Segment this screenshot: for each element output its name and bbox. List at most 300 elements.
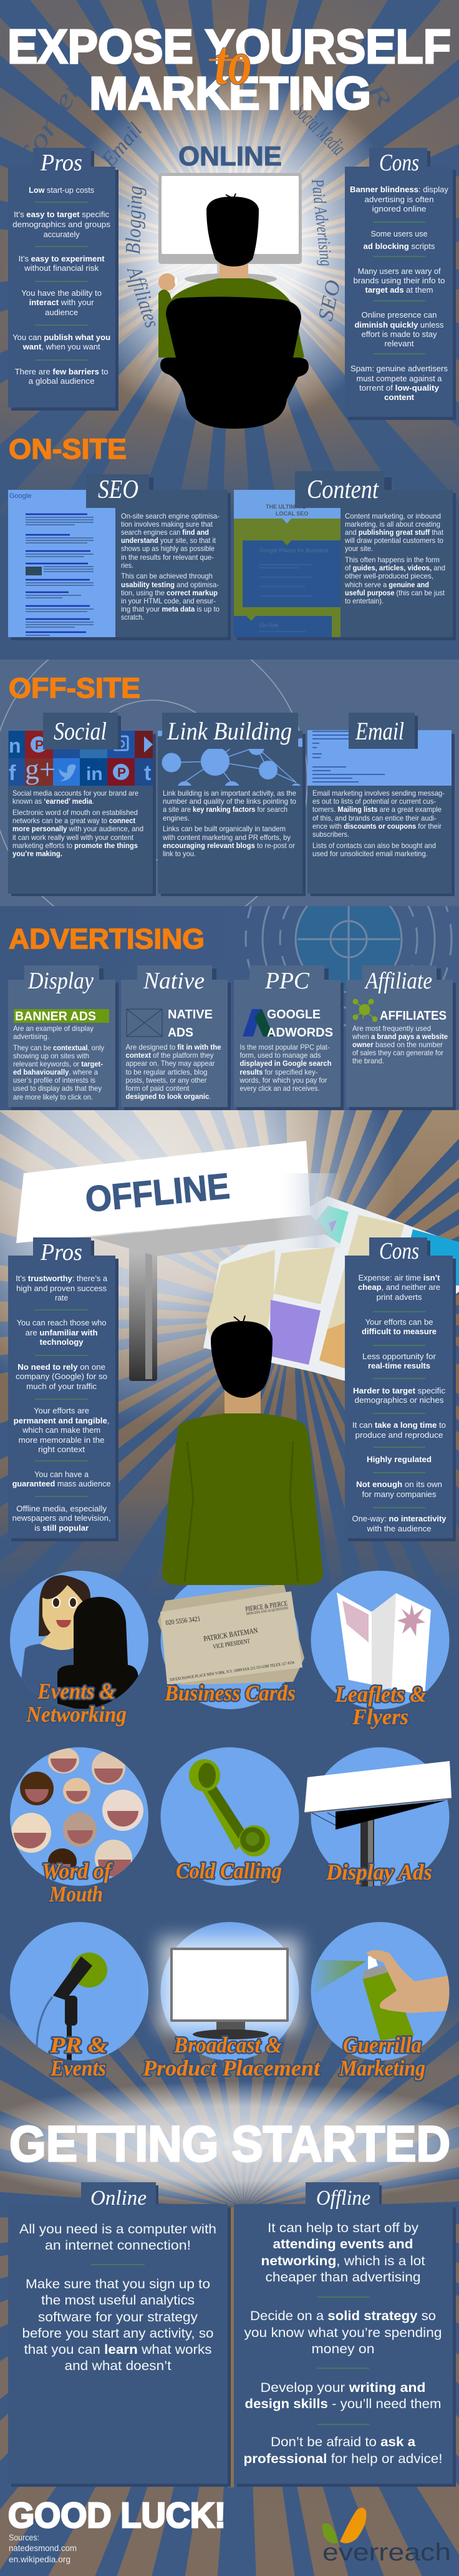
offline tips — [243, 2221, 443, 2466]
offline tips: It can help to start off by — [268, 2221, 419, 2235]
sign text: offline: OFFLINE — [84, 1166, 231, 1220]
cons list: Expense: air time isn’t — [358, 1273, 440, 1282]
background: off-site section — [0, 660, 459, 906]
pros list: demographics and groups — [12, 220, 111, 229]
display text: Are an example of display — [13, 1024, 94, 1033]
illustration: person at computer — [158, 193, 309, 429]
background script words: Blogging — [122, 185, 147, 255]
heading: online: Online — [90, 2187, 147, 2210]
pros list: is still popular — [34, 1523, 89, 1533]
heading: affiliate: Affiliate — [364, 968, 432, 994]
heading: good luck: GOOD LUCK! — [8, 2496, 226, 2535]
pros list — [12, 185, 111, 386]
content text: of guides, articles, videos, and — [345, 564, 445, 572]
image: social icons mosaic: P — [35, 738, 44, 753]
cons list: Highly regulated — [367, 1455, 432, 1464]
circle: broadcast and product placement — [142, 1922, 321, 2081]
email text: used for unsolicited email marketing. — [312, 849, 428, 858]
label: broadcast and product placement: Broadcast & — [173, 2032, 282, 2057]
illustration: telephone handset — [189, 1759, 270, 1856]
illustration: two people talking — [21, 1575, 138, 1710]
display text — [13, 1024, 104, 1101]
image: link network — [158, 731, 302, 786]
title: MARKETING — [89, 67, 371, 119]
label: cold calling: Cold Calling — [176, 1858, 282, 1883]
cons list: Harder to target specific — [353, 1386, 446, 1395]
background script words: Content — [7, 60, 97, 178]
logo: everreach — [322, 2507, 451, 2566]
cons list: torrent of low-quality — [359, 383, 440, 393]
pros list: permanent and tangible , — [14, 1416, 110, 1425]
heading: seo: SEO — [98, 476, 138, 504]
pros list: newspapers and television, — [12, 1513, 111, 1523]
social text: Social media accounts for your brand are — [12, 789, 138, 798]
cons list: content — [384, 393, 415, 402]
sources: en.wikipedia.org — [9, 2554, 70, 2564]
heading: ppc: PPC — [264, 968, 310, 994]
google adwords label — [267, 1008, 333, 1040]
google adwords label: ADWORDS — [267, 1026, 333, 1040]
social text: networks can be a great way to connect — [12, 816, 135, 825]
cons list: Online presence can — [362, 310, 437, 320]
panel: native — [121, 965, 231, 1110]
pros list: guaranteed mass audience — [12, 1479, 111, 1488]
panel: seo — [8, 474, 231, 640]
heading: content: Content — [307, 476, 379, 504]
panel: display — [8, 965, 118, 1110]
offline tips: Don’t be afraid to ask a — [271, 2435, 415, 2449]
icon: affiliate network — [353, 998, 378, 1022]
cons list: demographics or niches — [354, 1395, 444, 1405]
heading: advertising: ADVERTISING — [9, 923, 205, 955]
panel: online cons — [345, 148, 456, 420]
cons list: Some users use — [370, 229, 428, 238]
sources: Sources: — [9, 2532, 39, 2542]
email text: Email marketing involves sending messag- — [312, 789, 445, 798]
display text: are more likely to click on. — [13, 1093, 93, 1101]
label: guerrilla marketing: Marketing — [339, 2056, 425, 2081]
seo text: usability testing and optimisa- — [121, 580, 219, 589]
affiliate text: of sales they can generate for — [352, 1048, 443, 1057]
pros list: much of your traffic — [26, 1382, 97, 1391]
cons list: print adverts — [377, 1292, 422, 1302]
image: social icons mosaic: in — [86, 764, 103, 784]
link building text: a site are key ranking factors for search — [163, 805, 287, 814]
pros list: interact with your — [29, 298, 94, 307]
background: getting started glow and fade — [0, 1972, 459, 2576]
email text: tomers. Mailing lists are a great example — [312, 805, 442, 814]
label: events and networking: Networking — [26, 1702, 127, 1727]
affiliate text — [352, 1024, 448, 1065]
pros list: You have the ability to — [21, 288, 102, 298]
image: guide thumbnail: LOCAL SEO — [276, 510, 308, 517]
circle: word of mouth — [10, 1747, 148, 1906]
content text: other well-produced pieces, — [345, 572, 433, 580]
label: guerrilla marketing — [339, 2032, 425, 2081]
seo text — [121, 512, 220, 622]
cons list — [352, 1273, 447, 1533]
background script words: Affiliates — [122, 263, 163, 331]
online tips: Make sure that you sign up to — [26, 2277, 210, 2291]
content text: Content marketing, or inbound — [345, 512, 441, 520]
seo text: understand your site, so that it — [121, 536, 216, 545]
background script words: PR — [347, 58, 396, 112]
display text: showing up on sites with — [13, 1051, 89, 1060]
background: offline glow and fade — [0, 1110, 459, 1603]
banner ads label: BANNER ADS — [15, 1010, 96, 1023]
background: getting started rays — [0, 1972, 459, 2576]
heading: offline: Offline — [316, 2187, 370, 2210]
seo text: shows up as highly as possible — [121, 544, 215, 553]
email text: subscribers. — [312, 830, 349, 839]
pros list: Your efforts are — [34, 1406, 89, 1415]
display text: ed bahaviourally, where a — [13, 1068, 98, 1076]
pros list: There are few barriers to — [15, 367, 109, 376]
seo text: scratch. — [121, 613, 144, 622]
google adwords label: GOOGLE — [267, 1008, 321, 1022]
label: leaflets and flyers — [334, 1682, 427, 1729]
ppc text: every click an ad receives. — [239, 1084, 319, 1093]
native text: to be regular articles, blog — [126, 1068, 207, 1076]
content text: useful purpose (this can be just — [345, 588, 445, 597]
seo text: in the results for relevant que- — [121, 553, 214, 562]
cons list: One-way: no interactivity — [352, 1514, 447, 1523]
image: social icons mosaic — [9, 731, 153, 786]
cons list — [350, 185, 448, 402]
offline tips: attending events and — [273, 2237, 413, 2252]
social text: Electronic word of mouth on established — [12, 808, 138, 817]
illustration: blank billboard sign — [16, 1141, 343, 1381]
cons list: effort is made to stay — [362, 329, 437, 339]
illustration: glowing television — [159, 1938, 300, 2039]
link building text: Links can be built organically in tandem — [163, 824, 286, 833]
cons list: ad blocking scripts — [363, 242, 435, 251]
email text: ence with discounts or coupons for their — [312, 822, 442, 831]
image: guide thumbnail: THE ULTIMATE — [266, 504, 306, 510]
illustration: stack of business cards: PATRICK BATEMAN — [203, 1626, 259, 1643]
label: guerrilla marketing: Guerrilla — [343, 2032, 422, 2057]
heading: online: ONLINE — [178, 141, 282, 172]
native text: context of the platform they — [126, 1051, 213, 1060]
pros list: which can make them — [22, 1425, 100, 1435]
ppc text: results for specified key- — [239, 1068, 318, 1076]
seo text: tion, using the correct markup — [121, 588, 218, 597]
panel: offline cons — [345, 1237, 456, 1541]
offline tips: professional for help or advice! — [243, 2452, 443, 2466]
affiliate text: the brand. — [352, 1056, 384, 1065]
illustration: stack of business cards: 358 EXCHANGE PLACE NEW YORK, N.Y. 10099 FAX 212 555 6390 TELEX 127 4534 — [169, 1661, 295, 1682]
image: search results: Google — [9, 492, 31, 500]
seo text: tion involves making sure that — [121, 520, 213, 529]
pros list — [12, 1274, 111, 1533]
affiliate text: Are most frequently used — [352, 1024, 431, 1033]
seo text: This can be achieved through — [121, 572, 213, 580]
pros list: audience — [45, 308, 78, 317]
panel: getting started online — [8, 2182, 234, 2487]
ppc text: Is the most popular PPC plat- — [239, 1043, 329, 1051]
panel: content — [234, 471, 456, 640]
illustration: microphone — [37, 1953, 107, 2061]
panel: online pros — [8, 148, 118, 411]
circle: business cards — [158, 1571, 304, 1709]
label: leaflets and flyers: Leaflets & — [334, 1682, 427, 1707]
background script words: Paid Advertising — [307, 178, 336, 267]
label: word of mouth — [42, 1858, 113, 1906]
cons list: It can take a long time to — [352, 1420, 446, 1430]
content text: your site. — [345, 544, 373, 553]
display text: user’s profile of interests is — [13, 1076, 95, 1085]
seo text: in your HTML code, and ensur- — [121, 597, 216, 605]
illustration: talking mouths — [11, 1747, 143, 1877]
heading: link building: Link Building — [167, 717, 292, 745]
pros list: It’s easy to target specific — [14, 210, 110, 219]
panel: offline pros — [8, 1237, 118, 1541]
email text — [312, 789, 445, 858]
label: events and networking — [26, 1679, 127, 1727]
label: broadcast and product placement: Product Placement — [142, 2056, 321, 2081]
social text: marketing efforts to promote the things — [12, 841, 138, 850]
native text: posts, tweets, or any other — [126, 1076, 207, 1085]
offline tips: you know what you’re spending — [244, 2326, 442, 2340]
illustration: spray can in hand — [311, 1950, 452, 2041]
link building text: link to you. — [163, 849, 196, 858]
sources: natedesmond.com — [9, 2543, 77, 2553]
background: online rays — [0, 0, 459, 660]
online tips: All you need is a computer with — [19, 2222, 216, 2237]
icon: target crosshair — [244, 906, 453, 1026]
cons list: diminish quickly unless — [354, 320, 444, 329]
off-site target arcs — [0, 660, 307, 906]
label: business cards: Business Cards — [164, 1681, 296, 1705]
ppc text: form, used to manage ads — [239, 1051, 321, 1060]
background: offline rays — [0, 1110, 459, 1603]
title — [7, 20, 451, 119]
display text: They can be contextual, only — [13, 1043, 104, 1052]
pros list: accurately — [44, 230, 80, 239]
seo text: ing that your meta data is up to — [121, 605, 220, 613]
cons list: brands using their info to — [353, 276, 445, 285]
heading: cons: Cons — [379, 150, 419, 176]
cons list: must compete against a — [357, 374, 442, 383]
social text: it can work really well with your content — [12, 833, 134, 842]
online tips: that you can learn what works — [24, 2343, 212, 2357]
illustration: offline person from behind — [162, 1315, 323, 1585]
image: social icons mosaic: f — [9, 761, 16, 785]
pros list: a global audience — [29, 376, 95, 386]
panel: affiliate — [346, 965, 456, 1110]
image: guide thumbnail: Google Places for Business — [259, 547, 329, 554]
display text: used to display ads that they — [13, 1084, 102, 1093]
online tips: and what doesn’t — [65, 2359, 172, 2373]
billboard pole — [129, 1239, 157, 1381]
social text: more personally with your audience, and — [12, 824, 143, 833]
label: pr and events: PR & — [49, 2032, 107, 2057]
pros list: technology — [40, 1337, 84, 1347]
cons list: Spam: genuine advertisers — [350, 364, 448, 373]
heading: on-site: ON-SITE — [9, 433, 127, 465]
link building text: number and quality of the links pointing to — [163, 797, 296, 806]
online tips — [19, 2222, 216, 2373]
pros list: Low start-up costs — [29, 185, 95, 195]
content text: will draw potential customers to — [344, 536, 443, 545]
cons list: produce and reproduce — [355, 1430, 443, 1440]
label: word of mouth: Mouth — [49, 1881, 103, 1906]
online tips: before you start any activity, so — [22, 2326, 213, 2341]
illustration: stack of business cards: VICE PRESIDENT — [213, 1638, 251, 1651]
cons list: ignored online — [372, 204, 427, 213]
pros list: It’s trustworthy: there’s a — [16, 1274, 108, 1283]
offline tips: cheaper than advertising — [266, 2270, 420, 2285]
pros list: without financial risk — [24, 263, 99, 273]
image: guide thumbnail — [234, 490, 341, 637]
native ads label: ADS — [168, 1026, 193, 1040]
circle: guerrilla marketing — [311, 1922, 452, 2081]
pros list: are unfamiliar with — [26, 1328, 98, 1337]
content text — [344, 512, 445, 605]
label: word of mouth: Word of — [42, 1858, 113, 1883]
illustration: stack of business cards: 020 5556 3421 — [165, 1615, 201, 1627]
display text: advertising. — [13, 1032, 49, 1041]
background: fine rays near monitor — [118, 102, 345, 386]
heading: pros: Pros — [40, 150, 82, 176]
icon: adwords logo — [243, 1009, 274, 1037]
native text: Are designed to fit in with the — [126, 1043, 221, 1051]
image: search results — [8, 490, 115, 637]
cons list: real-time results — [368, 1361, 430, 1370]
background script words: Email — [97, 119, 147, 172]
image: social icons mosaic: P — [117, 766, 126, 780]
native text — [126, 1043, 221, 1101]
native text: form of paid content — [126, 1084, 190, 1093]
heading: email: Email — [355, 717, 404, 745]
content text: to entertain). — [345, 597, 384, 605]
content text: marketing, is all about creating — [345, 520, 440, 529]
image: social icons mosaic: t — [144, 761, 151, 785]
background: online glow and fade — [0, 0, 459, 660]
label: pr and events: Events — [50, 2056, 106, 2081]
cons list: difficult to measure — [362, 1327, 437, 1336]
link building text: encouraging relevant blogs to re-post or — [163, 841, 295, 850]
cons list: Less opportunity for — [362, 1352, 437, 1361]
panel: social — [8, 713, 156, 896]
panel: ppc — [234, 965, 344, 1110]
label: events and networking: Events & — [37, 1679, 115, 1704]
email text: Lists of contacts can also be bought and — [312, 841, 436, 850]
icon: native ads box — [127, 1009, 162, 1037]
panel: email — [307, 713, 455, 896]
pros list: No need to rely on one — [17, 1362, 105, 1372]
pros list: You can reach those who — [17, 1318, 107, 1327]
circle: cold calling — [161, 1747, 299, 1886]
ppc text: words, for which you pay for — [239, 1076, 327, 1085]
affiliate text: when a brand pays a website — [352, 1032, 448, 1041]
heading: off-site: OFF-SITE — [9, 672, 140, 704]
label: pr and events — [49, 2032, 107, 2081]
heading: pros: Pros — [40, 1239, 82, 1266]
image: guide thumbnail: On-Site — [259, 622, 279, 628]
heading: cons: Cons — [379, 1238, 419, 1264]
background script words: Social Media — [289, 99, 350, 160]
cons list: relevant — [384, 339, 414, 348]
link building text: with content marketing and PR efforts, by — [162, 833, 291, 842]
cons list: cheap, and neither are — [358, 1282, 440, 1292]
online tips: software for your strategy — [38, 2310, 198, 2325]
cons list: Banner blindness: display — [350, 185, 448, 194]
native text: appear on. They may appear — [126, 1059, 215, 1068]
circle: pr and events — [10, 1922, 148, 2081]
email text: es out to lists of potential or current cus- — [312, 797, 436, 806]
link building text: engines. — [163, 814, 190, 822]
pros list: It’s easy to experiment — [19, 254, 105, 263]
link building text — [162, 789, 296, 858]
illustration: stack of business cards: PIERCE & PIERCE — [245, 1600, 288, 1613]
affiliate text: owner based on the number — [352, 1040, 443, 1049]
cons list: Your efforts can be — [365, 1317, 433, 1327]
online tips: the most useful analytics — [41, 2293, 195, 2308]
social text: known as ‘earned’ media. — [12, 797, 94, 806]
pros list: right context — [38, 1445, 85, 1454]
circle: events and networking — [10, 1571, 148, 1727]
illustration: roadside billboard — [304, 1761, 452, 1886]
affiliates label: AFFILIATES — [380, 1009, 447, 1023]
social text — [12, 789, 143, 858]
heading: native: Native — [143, 968, 205, 994]
circle: display ads — [304, 1747, 452, 1886]
cons list: advertising is often — [364, 195, 434, 204]
illustration: stack of business cards: MERGERS AND ACQUISITIONS — [246, 1607, 289, 1616]
online tips: an internet connection! — [45, 2238, 191, 2253]
ppc text — [239, 1043, 332, 1093]
illustration: folded map leaflet — [203, 1196, 459, 1381]
background script words: SEO — [314, 278, 345, 323]
native ads label — [168, 1008, 213, 1040]
cons list: for many companies — [362, 1490, 437, 1499]
label: leaflets and flyers: Flyers — [352, 1704, 408, 1729]
image: email screenshot — [307, 730, 452, 786]
content text: and publishing great stuff that — [345, 528, 444, 537]
content text: which serve a genuine and — [344, 580, 429, 589]
background script words — [7, 58, 396, 331]
cons list: target ads at them — [365, 285, 433, 295]
pros list: more memorable in the — [19, 1435, 105, 1445]
background: advertising section — [0, 906, 459, 1112]
cons list: Many users are wary of — [358, 266, 441, 276]
seo text: On-site search engine optimisa- — [121, 512, 220, 520]
cons list: with the audience — [366, 1524, 432, 1533]
pros list: You can have a — [34, 1470, 89, 1479]
label: broadcast and product placement — [142, 2032, 321, 2081]
heading: display: Display — [27, 968, 94, 994]
social text: you’re making. — [12, 849, 62, 858]
email text: of this, and brands can entice their audi- — [312, 814, 437, 822]
content text: This often happens in the form — [345, 555, 440, 564]
image: social icons mosaic: n — [9, 734, 21, 757]
pros list: rate — [55, 1293, 68, 1302]
sources — [9, 2532, 77, 2564]
native ads label: NATIVE — [168, 1008, 213, 1022]
pros list: Offline media, especially — [16, 1504, 107, 1513]
ppc text: displayed in Google search — [239, 1059, 332, 1068]
native text: designed to look organic. — [126, 1092, 211, 1101]
link building text: Link building is an important activity, as the — [163, 789, 296, 798]
icon: monitor — [158, 173, 302, 285]
offline tips: networking , which is a lot — [261, 2254, 425, 2268]
pros list: want, when you want — [22, 342, 100, 351]
cons list: Not enough on its own — [356, 1480, 442, 1489]
circle: leaflets and flyers — [311, 1571, 449, 1729]
offline tips: Develop your writing and — [261, 2381, 425, 2395]
logo: everreach: everreach — [322, 2539, 451, 2566]
